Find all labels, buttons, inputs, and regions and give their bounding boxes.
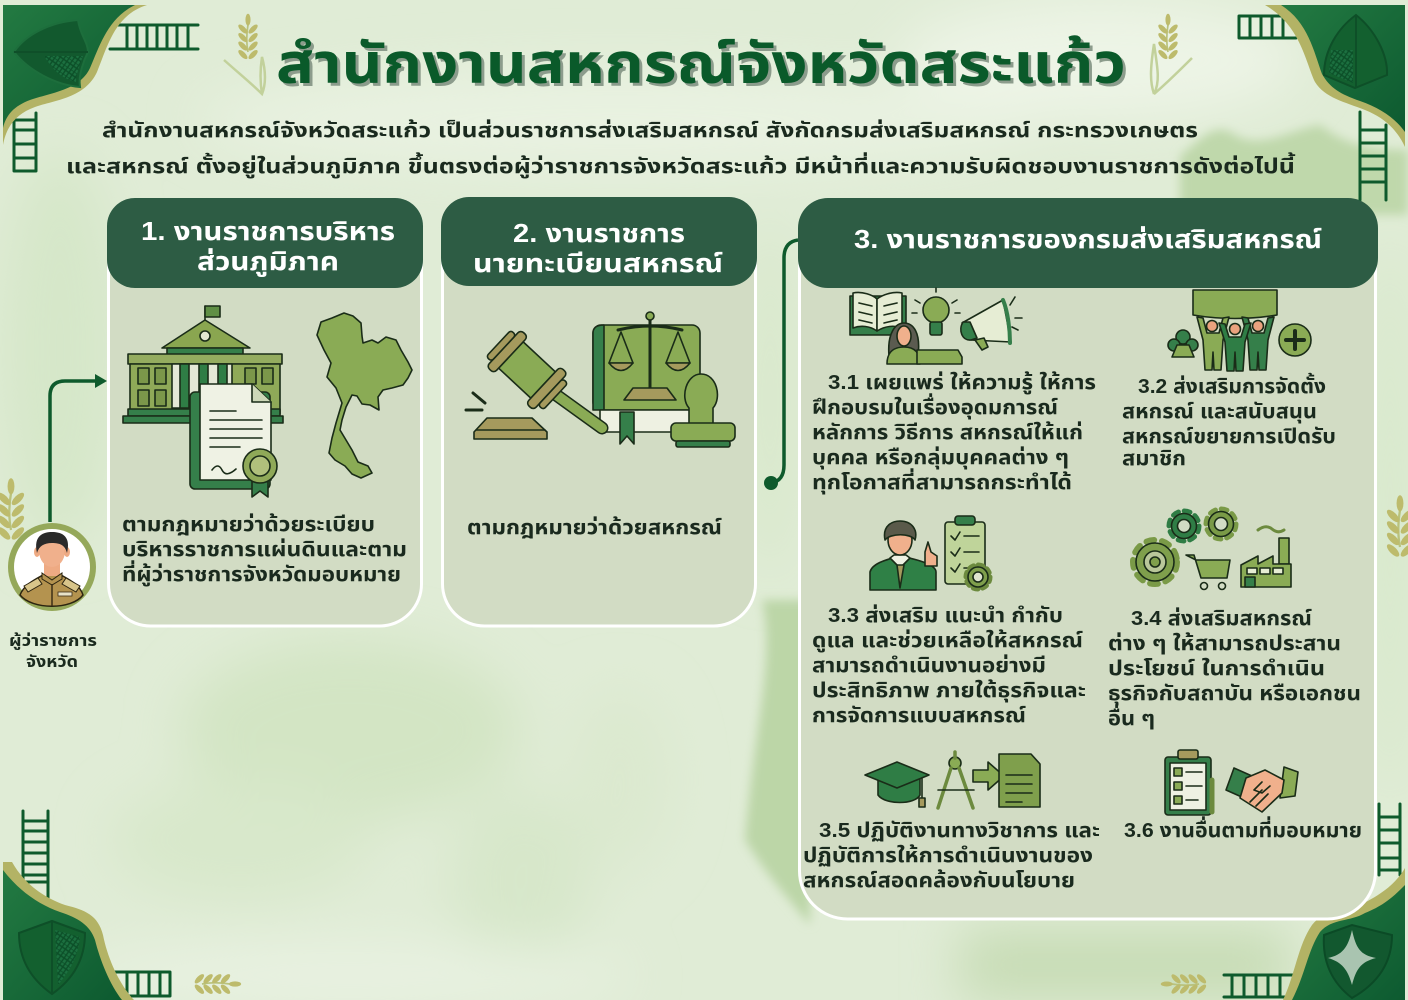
corner decoration: bottom left [3, 862, 134, 1000]
wheat: left edge [0, 478, 26, 542]
text: 3.1 [812, 372, 1096, 494]
text: 3.4: อื่น ๆ [1108, 704, 1155, 730]
panel 3: department of cooperative promotion [798, 198, 1378, 919]
panel 2 heading: 2. งานราชการ [513, 218, 685, 248]
panel 2 heading [441, 197, 757, 286]
wheat: bottom left [193, 973, 241, 995]
corner decoration: bottom right [1283, 868, 1405, 1000]
title: สำนักงานสหกรณ์จังหวัดสระแก้ว [276, 32, 1126, 95]
text: 3.4: ธุรกิจกับสถาบัน หรือเอกชน [1108, 683, 1361, 705]
text: 3.2: 3.2 ส่งเสริมการจัดตั้ง [1138, 373, 1326, 398]
icon: 3.2 people with banner [1168, 290, 1311, 371]
wheat: right edge [1385, 495, 1408, 559]
text: 3.4 [1108, 608, 1361, 730]
text: 3.1: หลักการ วิธีการ สหกรณ์ให้แก่ [812, 422, 1083, 444]
panel 3 heading: 3. งานราชการของกรมส่งเสริมสหกรณ์ [854, 224, 1322, 254]
icon: 3.3 officer with checklist [870, 516, 990, 590]
icon: map of Thailand [317, 313, 412, 478]
panel 1 body text [122, 514, 407, 586]
text: 3.1: 3.1 เผยแพร่ ให้ความรู้ ให้การ [828, 372, 1096, 394]
wheat: title right [1151, 14, 1192, 94]
panel 1 body text: ตามกฎหมายว่าด้วยระเบียบ [122, 514, 375, 536]
text: 3.3: 3.3 ส่งเสริม แนะนำ กำกับ [828, 605, 1063, 627]
text: 3.1: ทุกโอกาสที่สามารถกระทำได้ [812, 468, 1072, 494]
panel 1 heading: ส่วนภูมิภาค [197, 246, 339, 277]
panel 1 body text: บริหารราชการแผ่นดินและตาม [122, 539, 407, 561]
intro text: และสหกรณ์ ตั้งอยู่ในส่วนภูมิภาค ขึ้นตรงต่อผู้ว่าราชการจังหวัดสระแก้ว มีหน้าที่และความรับผิดชอบงานราชการดังต่อไปนี้ [66, 152, 1296, 178]
icon: 3.4 gears, cart, factory [1133, 509, 1291, 590]
text: 3.5 [803, 820, 1100, 892]
text: 3.2: สหกรณ์ และสนับสนุน [1122, 401, 1317, 423]
text: 3.3: ประสิทธิภาพ ภายใต้ธุรกิจและ [812, 680, 1086, 702]
corner decoration: top right [1265, 5, 1405, 147]
intro text: สำนักงานสหกรณ์จังหวัดสระแก้ว เป็นส่วนราชการส่งเสริมสหกรณ์ สังกัดกรมส่งเสริมสหกรณ์ กระทรวงเกษตร [102, 119, 1198, 142]
icon: government building with document [123, 306, 283, 497]
icon: gavel, law book, scales, stamp [466, 312, 735, 447]
text: 3.1: บุคคล หรือกลุ่มบุคคลต่าง ๆ [812, 447, 1069, 469]
panel 1: regional administration [107, 198, 423, 626]
icon: 3.1 book, teacher, bulb, megaphone [850, 288, 1022, 364]
text: 3.2: สหกรณ์ขยายการเปิดรับ [1122, 426, 1336, 448]
panel 2 body text: ตามกฎหมายว่าด้วยสหกรณ์ [467, 517, 722, 539]
text: 3.3: ดูแล และช่วยเหลือให้สหกรณ์ [812, 630, 1083, 652]
icon: 3.5 cap, compass, document [865, 752, 1040, 808]
text: 3.5: ปฏิบัติการให้การดำเนินงานของ [803, 845, 1093, 867]
panel 1 heading [107, 198, 423, 288]
text: 3.5: สหกรณ์สอดคล้องกับนโยบาย [803, 870, 1075, 892]
panel 2: cooperative registrar [441, 197, 757, 626]
text: 3.2: สมาชิก [1122, 448, 1186, 470]
panel 2 heading: นายทะเบียนสหกรณ์ [473, 248, 723, 278]
text: 3.4: ต่าง ๆ ให้สามารถประสาน [1108, 633, 1341, 655]
icon: 3.6 clipboard and handshake [1165, 750, 1298, 815]
wheat: title left [224, 14, 265, 94]
governor label: จังหวัด [26, 654, 78, 671]
governor [8, 523, 97, 671]
text: 3.3: การจัดการแบบสหกรณ์ [812, 705, 1026, 727]
corner decoration: top left [3, 5, 147, 145]
text: 3.3 [812, 605, 1086, 727]
panel 3 heading [798, 198, 1378, 288]
icon: governor portrait [8, 523, 96, 611]
connector: panel 3 link [764, 240, 798, 490]
text: 3.5: 3.5 ปฏิบัติงานทางวิชาการ และ [819, 820, 1100, 842]
wheat: bottom right [1161, 973, 1208, 995]
text: 3.4: ประโยชน์ ในการดำเนิน [1108, 658, 1325, 680]
governor label: ผู้ว่าราชการ [9, 632, 97, 651]
text: 3.6: 3.6 งานอื่นตามที่มอบหมาย [1124, 816, 1362, 842]
text: 3.4: 3.4 ส่งเสริมสหกรณ์ [1131, 608, 1312, 630]
panel 1 heading: 1. งานราชการบริหาร [141, 216, 395, 246]
text: 3.3: สามารถดำเนินงานอย่างมี [812, 655, 1046, 677]
panel 1 body text: ที่ผู้ว่าราชการจังหวัดมอบหมาย [122, 560, 401, 586]
governor label [9, 632, 97, 671]
text: 3.1: ฝึกอบรมในเรื่องอุดมการณ์ [812, 393, 1058, 419]
text: 3.2 [1122, 373, 1336, 470]
intro text [66, 119, 1296, 178]
connector arrow: governor to panel 1 [50, 374, 107, 522]
